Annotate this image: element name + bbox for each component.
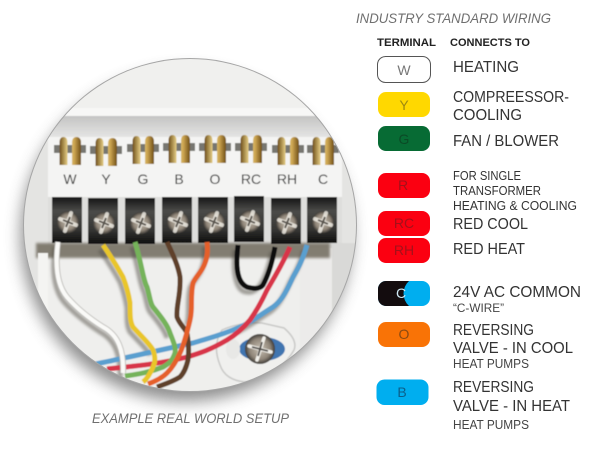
terminal letters: B xyxy=(174,171,184,187)
legend row: B reversing valve in heat: VALVE - IN HEAT xyxy=(453,398,570,415)
title: industry standard wiring: INDUSTRY STANDARD WIRING xyxy=(356,10,551,26)
wire: brown xyxy=(157,242,189,387)
terminal letters: RC xyxy=(241,171,261,187)
wire: white xyxy=(57,242,123,373)
wire: orange xyxy=(148,242,207,384)
legend row: RC red cool: RED COOL xyxy=(453,216,528,233)
mounting screw xyxy=(216,323,295,382)
column heading: connects to: CONNECTS TO xyxy=(450,37,530,49)
legend row: RH red heat: RED HEAT xyxy=(453,241,525,258)
legend row: B reversing valve in heat: HEAT PUMPS xyxy=(453,418,529,432)
caption: example real world setup: EXAMPLE REAL WORLD SETUP xyxy=(92,410,290,426)
legend row: W heating xyxy=(378,56,519,82)
gold terminal prongs xyxy=(54,135,339,166)
terminal letters: C xyxy=(318,171,328,187)
legend row: C 24V AC common: C xyxy=(396,285,406,301)
terminal letters: Y xyxy=(101,171,111,187)
legend row: G fan blower xyxy=(378,126,559,151)
legend row: RC red cool xyxy=(378,211,528,236)
legend row: R single transformer xyxy=(378,169,577,213)
legend row: R single transformer: FOR SINGLE xyxy=(453,169,521,183)
legend row: Y compressor cooling xyxy=(378,89,569,124)
column heading: terminal: TERMINAL xyxy=(377,37,436,49)
legend row: O reversing valve in cool xyxy=(378,322,573,371)
terminal letters: O xyxy=(210,171,221,187)
terminal letters: G xyxy=(138,171,148,187)
legend row: O reversing valve in cool: REVERSING xyxy=(453,322,534,339)
terminal letters xyxy=(63,174,328,185)
legend row: W heating: W xyxy=(397,62,411,78)
wire: blue xyxy=(96,245,307,364)
legend row: C 24V AC common xyxy=(378,281,581,315)
legend row: O reversing valve in cool: VALVE - IN COOL xyxy=(453,340,573,357)
wire: yellow xyxy=(103,245,155,382)
legend row: B reversing valve in heat: REVERSING xyxy=(453,379,534,396)
legend row: C 24V AC common: “C-WIRE” xyxy=(453,303,504,315)
terminal letters: W xyxy=(63,171,77,187)
legend row: O reversing valve in cool: HEAT PUMPS xyxy=(453,357,529,371)
photo: thermostat wiring in circular frame xyxy=(20,55,360,401)
legend row: B reversing valve in heat xyxy=(376,379,570,432)
legend row: W heating: HEATING xyxy=(453,59,519,76)
legend row: Y compressor cooling: COOLING xyxy=(453,107,522,124)
screw terminal blocks xyxy=(52,196,337,244)
legend row: Y compressor cooling: COMPREESSOR- xyxy=(453,89,569,106)
legend row: G fan blower: G xyxy=(399,131,409,147)
legend row: G fan blower: FAN / BLOWER xyxy=(453,133,559,150)
legend row: B reversing valve in heat: B xyxy=(397,384,407,400)
legend row: C 24V AC common: 24V AC COMMON xyxy=(453,284,581,301)
legend row: Y compressor cooling: Y xyxy=(399,97,409,113)
legend row: R single transformer: HEATING & COOLING xyxy=(453,199,577,213)
terminal base plate xyxy=(36,243,360,400)
legend row: RH red heat: RH xyxy=(394,242,414,258)
legend row: O reversing valve in cool: O xyxy=(399,326,410,342)
terminal letters: RH xyxy=(277,171,297,187)
wire shadows xyxy=(54,247,304,378)
legend row: R single transformer: TRANSFORMER xyxy=(453,184,541,198)
wire: red xyxy=(107,247,290,369)
legend row: RH red heat xyxy=(378,238,525,263)
legend row: RC red cool: RC xyxy=(394,215,414,231)
wire: black jumper xyxy=(237,245,275,288)
wire: green xyxy=(125,242,175,376)
legend row: R single transformer: R xyxy=(398,177,408,193)
